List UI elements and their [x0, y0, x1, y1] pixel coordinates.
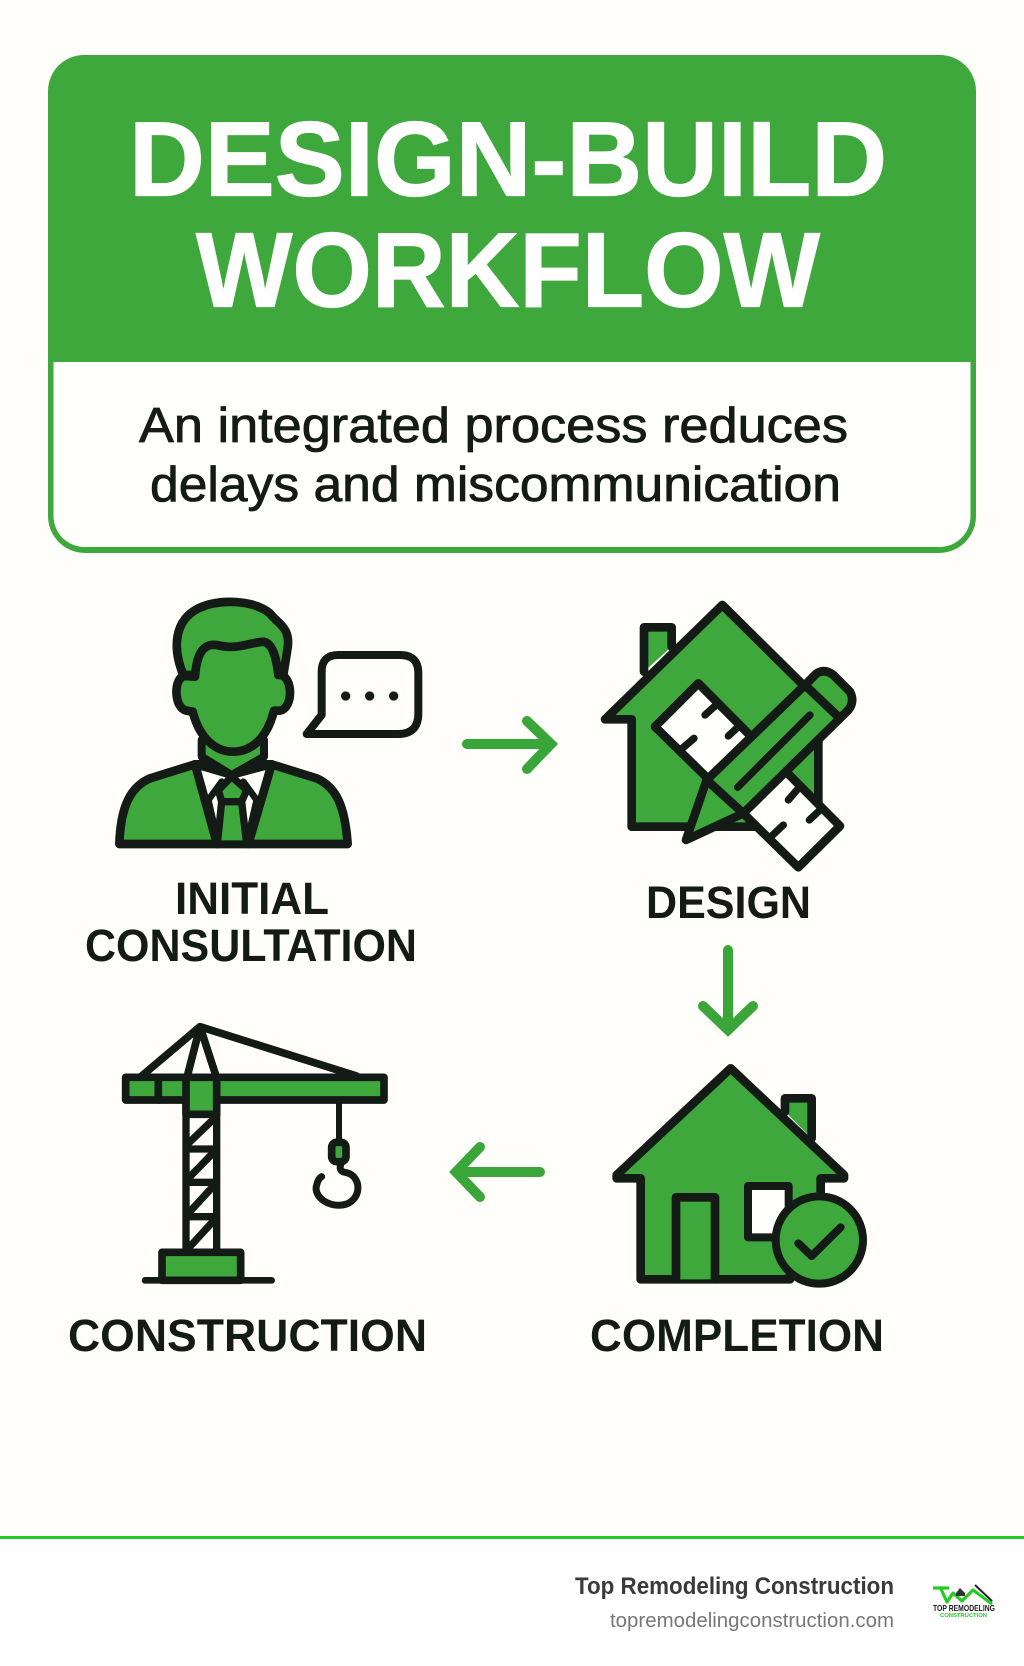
logo: [933, 1585, 995, 1619]
arrow: design to completion: [703, 950, 753, 1030]
panel: header card: [48, 55, 976, 553]
title: DESIGN-BUILD: [129, 100, 887, 218]
title: [129, 100, 887, 330]
subtitle: [139, 399, 848, 512]
subtitle: delays and miscommunication: [150, 458, 841, 512]
footer company name: Top Remodeling Construction: [575, 1573, 894, 1600]
footer website: topremodelingconstruction.com: [610, 1610, 894, 1632]
footer band: [0, 1536, 1024, 1666]
subtitle: An integrated process reduces: [139, 399, 848, 453]
icon: house with ruler and pencil: [605, 605, 852, 867]
icon: consultant with speech bubble: [119, 602, 418, 844]
label: completion: COMPLETION: [590, 1310, 884, 1361]
arrow: completion to construction: [456, 1147, 540, 1197]
title: WORKFLOW: [196, 212, 820, 330]
label: design: DESIGN: [646, 877, 811, 928]
icon: tower crane: [126, 1027, 384, 1280]
logo: TOP REMODELING: [933, 1603, 995, 1613]
label: initial consultation: [85, 873, 417, 971]
label: initial consultation: CONSULTATION: [85, 920, 417, 971]
label: construction: CONSTRUCTION: [68, 1310, 427, 1361]
logo: CONSTRUCTION: [940, 1613, 987, 1619]
label: initial consultation: INITIAL: [175, 873, 329, 924]
arrow: consultation to design: [467, 721, 551, 769]
icon: completed house with check badge: [617, 1068, 863, 1284]
